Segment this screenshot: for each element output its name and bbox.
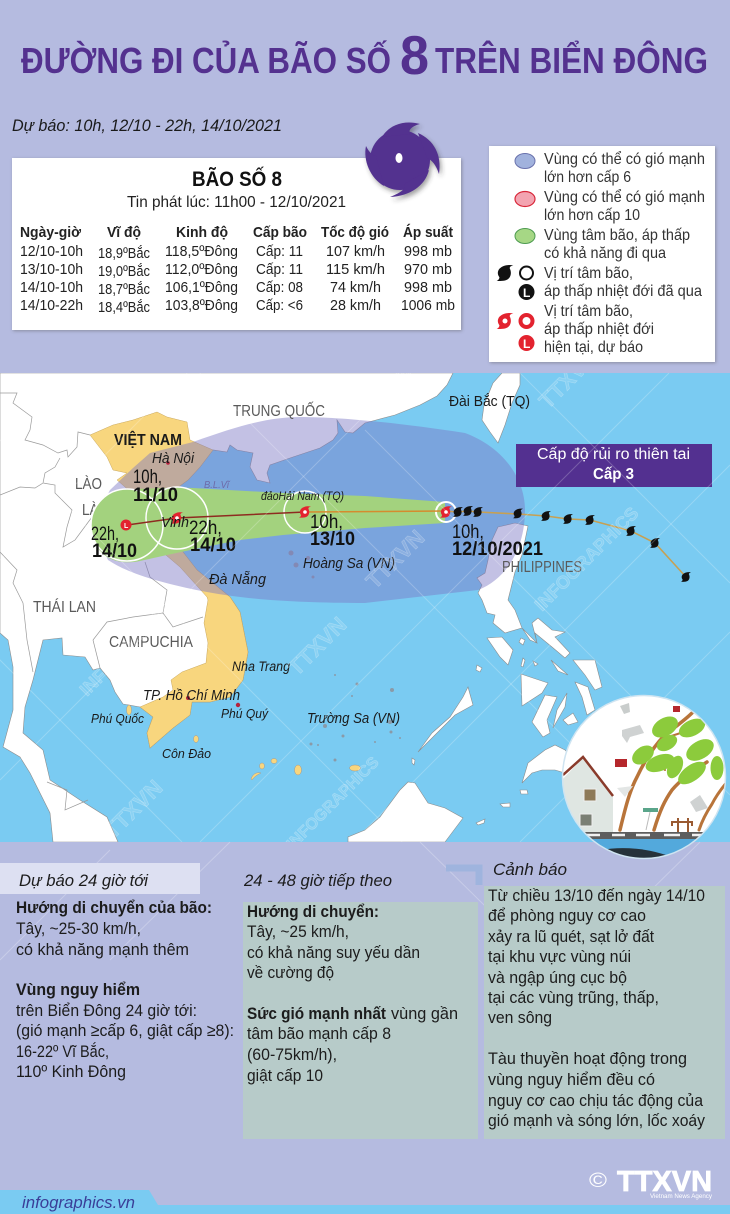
forecast period subtitle: Dự báo: 10h, 12/10 - 22h, 14/10/2021 (12, 116, 282, 135)
table row 2: 970 mb (404, 261, 452, 278)
watermark text: INFOGRAPHICS (284, 754, 383, 853)
table row 1 (20, 243, 452, 262)
panel: 24-48 hours: giật cấp 10 (247, 1066, 323, 1085)
label: Laos second mention, partly hidden: LÀO (82, 502, 109, 519)
map labels: places: B.L.Vĩ (204, 479, 230, 491)
map labels: places: Vinh (161, 514, 189, 531)
table row 4: 103,8ºĐông (165, 297, 238, 314)
panel: storm data table (12, 158, 461, 330)
flying debris (620, 703, 630, 714)
map labels: places: Đà Nẵng (209, 571, 267, 588)
table header row: Kinh độ (176, 224, 228, 241)
legend: current and forecast positions: L (523, 337, 530, 351)
legend: strong wind over level 6: Vùng có thể có gió mạnh (544, 150, 705, 168)
logo: TTXVN: TTXVN (617, 1166, 712, 1198)
legend: past positions: L (523, 286, 530, 300)
map labels: storm times: 11/10 (133, 485, 178, 506)
text block: next 24 hours: 16-22º Vĩ Bắc, (16, 1042, 109, 1061)
table row 4: 18,4ºBắc (98, 299, 150, 316)
panel: 24-48 hours: Sức gió mạnh nhất (247, 1004, 386, 1023)
sea (0, 373, 730, 842)
islands: Paracel and Spratly dots (288, 550, 401, 762)
watermark text: TTXVN (99, 775, 168, 844)
table row 1: 18,9ºBắc (98, 245, 150, 262)
text block: next 24 hours: Tây, ~25-30 km/h, (16, 919, 141, 938)
panel: 24-48 hours (243, 902, 478, 1139)
panel: warning: nguy cơ cao chịu tác động của (488, 1091, 703, 1110)
map labels: places: Côn Đảo (162, 746, 211, 761)
table row 1: 998 mb (404, 243, 452, 260)
watermark text: TTXVN (283, 612, 352, 681)
table header row: Áp suất (403, 224, 453, 241)
text block: next 24 hours: (gió mạnh ≥cấp 6, giật cấp ≥8): (16, 1021, 234, 1040)
land: Philippines (412, 523, 602, 825)
heading: 24-48 hours: 24 - 48 giờ tiếp theo (243, 871, 392, 890)
panel: 24-48 hours: tâm bão mạnh cấp 8 (247, 1024, 391, 1043)
watermark text (76, 324, 642, 853)
heading: warning: Cảnh báo (493, 860, 567, 879)
panel: 24-48 hours: có khả năng suy yếu dần (247, 943, 420, 962)
land: Taiwan (482, 373, 520, 443)
forecast radius circles (91, 487, 456, 561)
legend: past positions: Vị trí tâm bão, (544, 265, 633, 282)
legend: current and forecast positions: Vị trí tâm bão, (544, 303, 633, 320)
legend: storm centre zone (515, 227, 690, 262)
table row 2: 13/10-10h (20, 261, 83, 278)
section band: next 24 hours heading: Dự báo 24 giờ tới (19, 871, 149, 890)
table row 3: 74 km/h (330, 279, 381, 296)
map labels: places: đảoHải Nam (TQ) (261, 489, 344, 503)
map labels: places: Đài Bắc (TQ) (449, 393, 530, 410)
table row 4 (20, 297, 455, 316)
map labels: storm times (91, 467, 543, 562)
table row 3: 18,7ºBắc (98, 281, 150, 298)
table row 1: 107 km/h (326, 243, 385, 260)
icon: typhoon spiral (365, 123, 440, 197)
text block: next 24 hours: Hướng di chuyển của bão: (16, 898, 212, 917)
risk zone: wind over level 6 (92, 417, 525, 603)
legend: past positions: áp thấp nhiệt đới đã qua (544, 283, 702, 300)
logo: TTXVN: © (589, 1170, 607, 1192)
disaster risk level box (516, 444, 712, 487)
section band: next 24 hours heading (0, 863, 200, 894)
map labels: countries: CAMPUCHIA (109, 634, 194, 651)
text block: next 24 hours: có khả năng mạnh thêm (16, 940, 189, 959)
map labels: storm times: 14/10 (190, 535, 236, 556)
table row 2: Cấp: 11 (256, 261, 303, 278)
map labels: places: Phú Quý (221, 706, 269, 721)
land: Vietnam (90, 412, 248, 748)
table row 1: Cấp: 11 (256, 243, 303, 260)
map labels: places: Trường Sa (VN) (307, 710, 400, 727)
table header row (20, 224, 453, 241)
map labels: countries: PHILIPPINES (502, 559, 582, 576)
zone: storm centre corridor (91, 488, 445, 562)
footer band: infographics.vn (22, 1194, 135, 1212)
table row 3: Cấp: 08 (256, 279, 303, 296)
storm track: forecast (120, 506, 452, 530)
legend: strong wind over level 6 (515, 150, 705, 186)
table row 1: 12/10-10h (20, 243, 83, 260)
land: mainland Asia (0, 373, 453, 842)
watermark text: TTXVN (534, 345, 603, 414)
table row 4: 28 km/h (330, 297, 381, 314)
table row 4: Cấp: <6 (256, 297, 303, 314)
map labels: storm times: 10h, (133, 467, 162, 488)
map labels: storm times: 22h, (189, 518, 222, 539)
issue time: Tin phát lúc: 11h00 - 12/10/2021 (127, 194, 346, 211)
text block: next 24 hours: Vùng nguy hiểm (16, 980, 140, 999)
legend: strong wind over level 10: lớn hơn cấp 10 (544, 207, 640, 224)
table header row: Cấp bão (253, 224, 307, 241)
text block: next 24 hours: 110º Kinh Đông (16, 1062, 126, 1081)
table row 2 (20, 261, 452, 280)
footer band (0, 1190, 730, 1214)
text block: next 24 hours: trên Biển Đông 24 giờ tới: (16, 1001, 197, 1020)
tree trunks (620, 713, 727, 830)
table row 2: 112,0ºĐông (165, 261, 238, 278)
panel: warning: Từ chiều 13/10 đến ngày 14/10 (488, 886, 705, 905)
panel: warning: ven sông (488, 1008, 552, 1027)
map labels: storm times: 10h, (310, 512, 343, 533)
leaves (632, 716, 724, 784)
panel: warning: xảy ra lũ quét, sạt lở đất (488, 927, 654, 946)
legend: current and forecast positions (497, 303, 654, 356)
legend: storm centre zone: có khả năng đi qua (544, 245, 666, 262)
legend: current and forecast positions: hiện tại, dự báo (544, 339, 643, 356)
map labels: places: Nha Trang (232, 659, 290, 674)
table header row: Ngày-giờ (20, 224, 81, 241)
table row 1: 118,5ºĐông (165, 243, 238, 260)
table row 3: 998 mb (404, 279, 452, 296)
table header row: Vĩ độ (107, 224, 141, 241)
disaster risk level box: Cấp 3 (593, 466, 634, 483)
map labels: countries: TRUNG QUỐC (233, 402, 325, 420)
land: Borneo (348, 782, 463, 842)
text block: next 24 hours (16, 898, 234, 1081)
map labels: places: Phú Quốc (91, 711, 144, 726)
map labels: countries: LÀO (75, 476, 102, 493)
table row 3: 106,1ºĐông (165, 279, 238, 296)
table row 3 (20, 279, 452, 298)
table row 2: 115 km/h (326, 261, 385, 278)
table row 3: 14/10-10h (20, 279, 83, 296)
legend: strong wind over level 6: lớn hơn cấp 6 (544, 169, 631, 186)
title: ĐƯỜNG ĐI CỦA BÃO SỐ (21, 39, 391, 81)
legend: current and forecast positions: áp thấp nhiệt đới (544, 321, 654, 338)
map labels: storm times: 10h, (452, 522, 484, 543)
panel: 24-48 hours: vùng gần (391, 1004, 458, 1023)
map labels: storm times: 14/10 (92, 541, 137, 562)
panel: legend (489, 146, 715, 362)
panel: warning (484, 886, 725, 1139)
map labels: storm times: 12/10/2021 (452, 539, 543, 560)
table row 4: 1006 mb (401, 297, 455, 314)
watermark text: INFOGRAPHICS (531, 503, 642, 615)
panel: 24-48 hours: Tây, ~25 km/h, (247, 922, 349, 941)
faint watermark lines on lower section (0, 842, 700, 960)
table row 4: 14/10-22h (20, 297, 83, 314)
city dots (166, 461, 240, 707)
panel: warning: tại các vùng trũng, thấp, (488, 988, 659, 1007)
watermark text: INFOGRAPHICS (76, 588, 187, 700)
table header row: Tốc độ gió (321, 224, 389, 241)
map labels: places (91, 393, 530, 761)
legend: strong wind over level 10: Vùng có thể có gió mạnh (544, 188, 705, 206)
map labels: storm times: 22h, (91, 524, 119, 545)
map (0, 373, 730, 842)
map labels: countries: VIỆT NAM (114, 430, 182, 449)
title (21, 24, 708, 86)
watermark text: INFOGRAPHICS (356, 324, 455, 423)
panel: 24-48 hours: (60-75km/h), (247, 1045, 337, 1064)
map labels: places: Hà Nội (152, 450, 195, 467)
panel: warning: để phòng nguy cơ cao (488, 906, 646, 925)
map labels: storm times: 13/10 (310, 529, 355, 550)
map labels: countries: THÁI LAN (33, 599, 96, 616)
disaster risk level box: Cấp độ rủi ro thiên tai (537, 446, 690, 463)
panel: warning: gió mạnh và sóng lớn, lốc xoáy (488, 1111, 705, 1130)
islands (126, 705, 360, 780)
legend: strong wind over level 10 (515, 188, 705, 224)
ground and water (585, 832, 703, 839)
corner bracket (446, 868, 479, 885)
storm track: past (305, 506, 691, 582)
map labels: countries (33, 402, 582, 651)
panel: 24-48 hours: Hướng di chuyển: (247, 902, 379, 921)
logo: TTXVN: Vietnam News Agency (650, 1194, 712, 1200)
legend: storm centre zone: Vùng tâm bão, áp thấp (544, 227, 690, 244)
panel: warning: Tàu thuyền hoạt động trong (488, 1049, 687, 1068)
panel: warning: và ngập úng cục bộ (488, 968, 627, 987)
panel: warning: vùng nguy hiểm đều có (488, 1070, 655, 1089)
panel: 24-48 hours: về cường độ (247, 963, 334, 982)
storm track: forecast: L (124, 523, 129, 530)
map labels: places: Hoàng Sa (VN) (303, 555, 395, 572)
title: 8 (400, 24, 429, 86)
table row 2: 19,0ºBắc (98, 263, 150, 280)
legend: past positions (497, 265, 702, 300)
house (560, 758, 613, 832)
land borders (0, 393, 203, 810)
illustration: storm over house (560, 696, 730, 864)
map labels: places: TP. Hồ Chí Minh (143, 687, 240, 704)
panel: warning: tại khu vực vùng núi (488, 947, 631, 966)
table heading: BÃO SỐ 8 (192, 167, 282, 191)
watermark text: TTXVN (361, 525, 430, 594)
watermark lattice (0, 373, 730, 842)
